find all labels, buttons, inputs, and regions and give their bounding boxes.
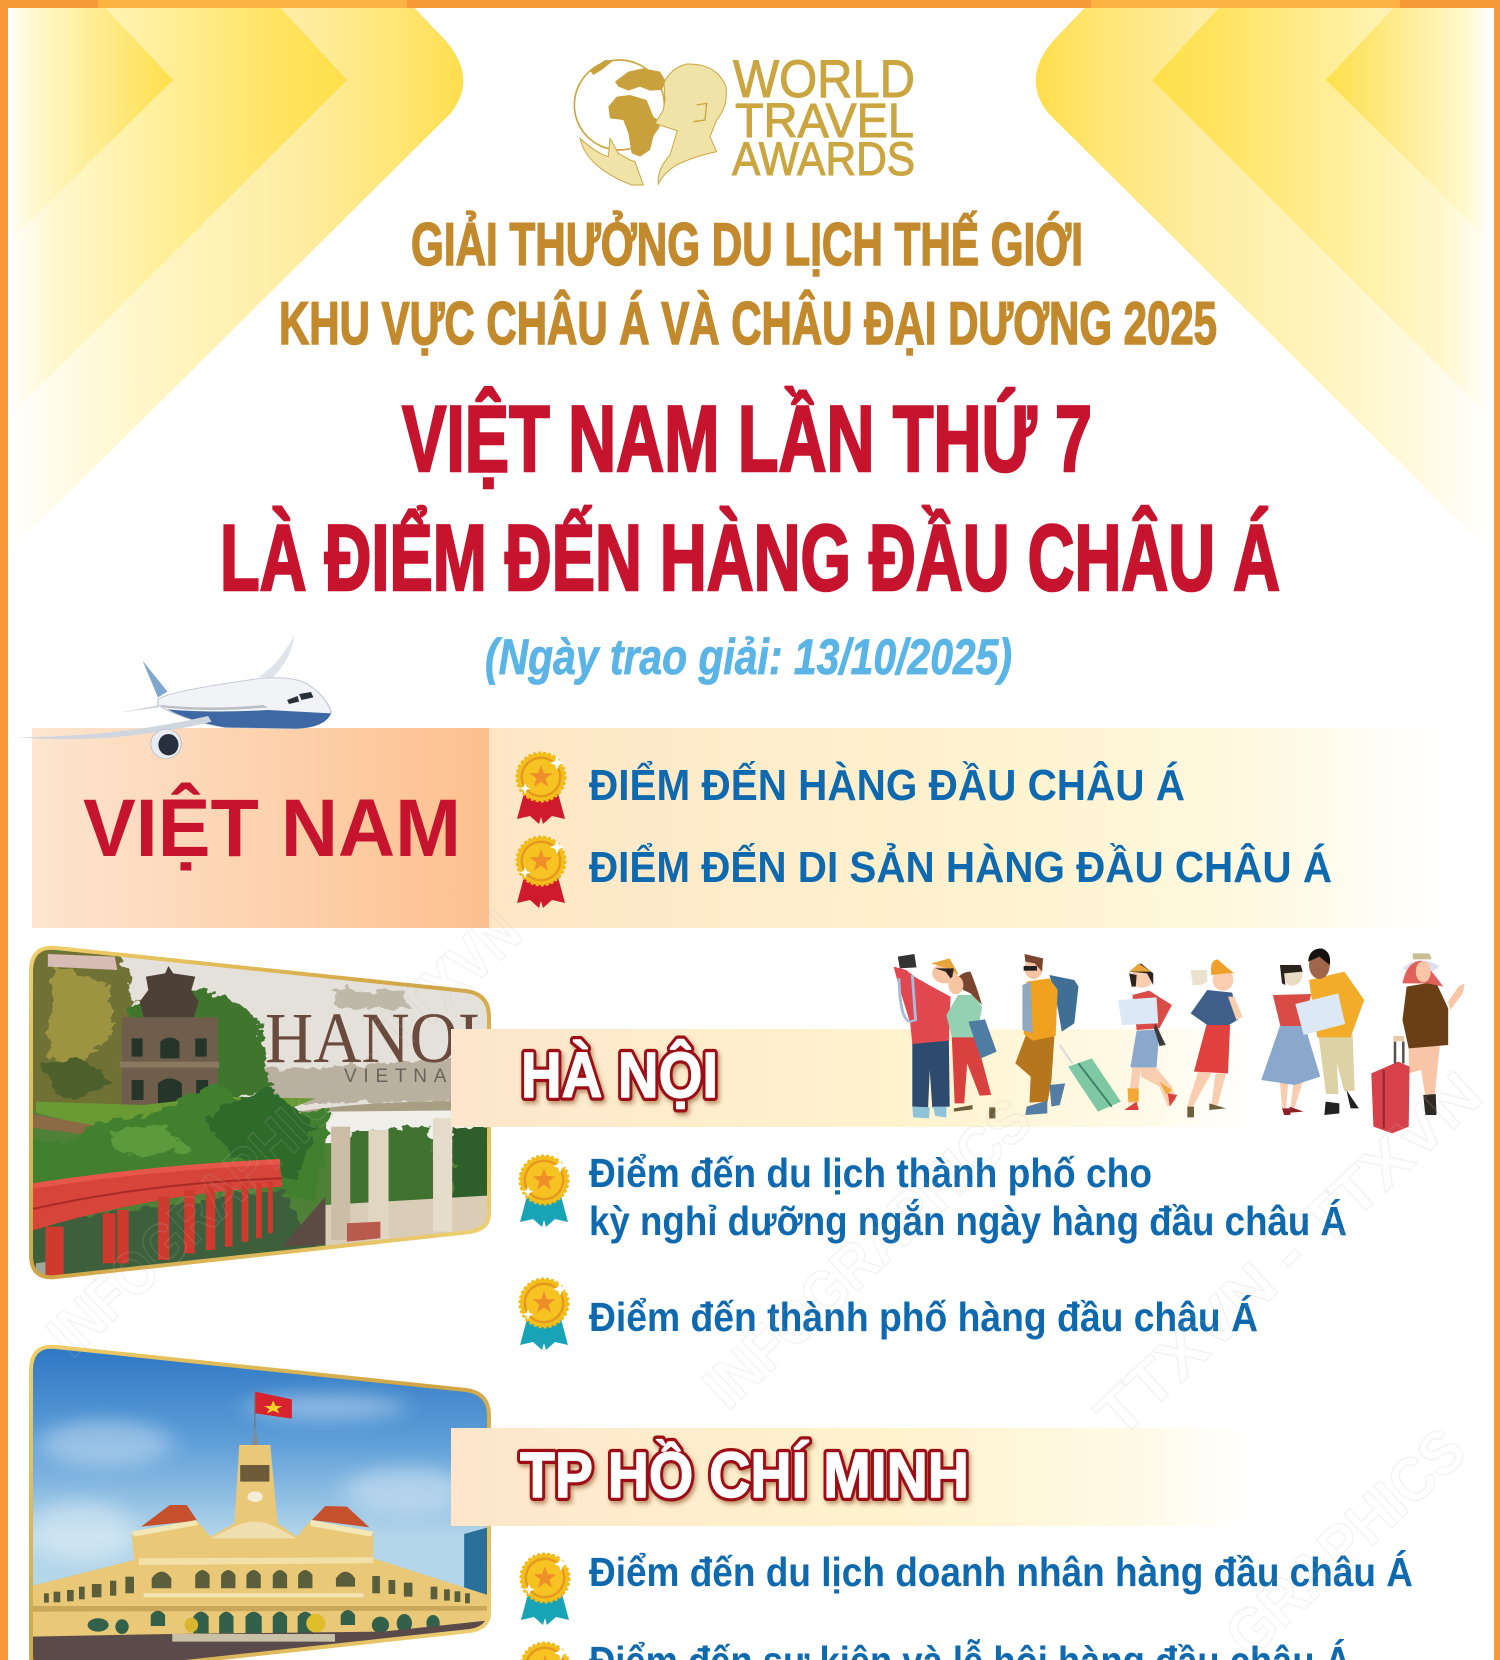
illustration: tourists (894, 948, 1465, 1133)
building body (29, 1445, 493, 1640)
icon: globe, head and hands (574, 60, 726, 185)
award text two lines: kỳ nghỉ dưỡng ngắn ngày hàng đầu châu Á (589, 1198, 1347, 1244)
city name outline: TP HỒ CHÍ MINH (520, 1439, 969, 1511)
photo: Hà Nội (19, 943, 507, 1283)
country name: VIỆT NAM (83, 783, 461, 874)
photo: TP Hồ Chí Minh (29, 1340, 498, 1660)
logo wordmark: AWARDS (732, 132, 915, 185)
heading: award name (279, 211, 1217, 357)
watermark: INFOGRAPHICS - TTXVN (34, 897, 535, 1370)
decorative yellow chevrons right (1036, 0, 1495, 557)
logo wordmark: TRAVEL (735, 95, 914, 148)
gold frame (31, 948, 489, 1277)
woman in green top (946, 972, 997, 1118)
award text two lines: Điểm đến du lịch thành phố cho (589, 1150, 1152, 1196)
panel: Hà Nội heading band (451, 1029, 1251, 1127)
subtitle: award date: (Ngày trao giải: 13/10/2025) (485, 629, 1012, 685)
Huc bridge (29, 1163, 282, 1277)
watermark: INFOGRAPHICS (690, 1085, 1045, 1422)
woman with red suitcase (1371, 953, 1465, 1133)
icon: red medal (517, 753, 565, 824)
man with camera (894, 954, 959, 1118)
awards background (489, 728, 1439, 928)
country label background (32, 728, 489, 928)
flag (255, 1392, 292, 1419)
icon: teal medal (520, 1279, 568, 1350)
photo: Hà Nội: VIETNAM (344, 1066, 469, 1087)
city name fill: HÀ NỘI (521, 1038, 718, 1111)
city name fill: TP HỒ CHÍ MINH (520, 1439, 969, 1511)
woman in striped top (1187, 959, 1243, 1117)
icon: red medal (517, 837, 565, 908)
panel: TP Hồ Chí Minh heading band (451, 1428, 1251, 1526)
photo scene (33, 950, 487, 1276)
decorative yellow chevrons left (4, 0, 463, 557)
icon: teal medal (520, 1156, 568, 1227)
award text: ĐIỂM ĐẾN DI SẢN HÀNG ĐẦU CHÂU Á (589, 841, 1332, 892)
icon: airplane (17, 635, 331, 759)
logo wordmark (732, 50, 915, 185)
icon: teal medal (521, 1643, 569, 1660)
heading: award name: GIẢI THƯỞNG DU LỊCH THẾ GIỚI (411, 211, 1083, 278)
photo lettering: HANOI (265, 998, 480, 1078)
award text: ĐIỂM ĐẾN HÀNG ĐẦU CHÂU Á (589, 759, 1185, 810)
band (451, 1428, 1251, 1526)
gold frame (31, 1347, 489, 1660)
watermark: TTXVN - TTXVN (1082, 1059, 1495, 1450)
award text: Điểm đến thành phố hàng đầu châu Á (589, 1294, 1258, 1340)
title (220, 386, 1280, 610)
panel: Việt Nam (32, 728, 1439, 928)
city name outline: HÀ NỘI (521, 1038, 718, 1111)
logo: World Travel Awards (574, 50, 915, 185)
band (451, 1029, 1251, 1127)
list: Hà Nội awards (520, 1150, 1347, 1350)
photo scene (29, 1340, 498, 1660)
couple with map (1261, 948, 1364, 1115)
pagoda (140, 966, 199, 1017)
award text two lines (589, 1150, 1347, 1244)
logo wordmark: WORLD (733, 50, 915, 109)
watermark (34, 897, 1495, 1660)
icon: teal medal (521, 1554, 569, 1625)
title: VIỆT NAM LẦN THỨ 7 (402, 386, 1092, 491)
award text: Điểm đến du lịch doanh nhân hàng đầu châu Á (589, 1549, 1413, 1595)
right tower (464, 1527, 488, 1597)
woman with map (1118, 963, 1177, 1110)
man with backpack and suitcase (1015, 954, 1121, 1115)
list: TP Hồ Chí Minh awards (521, 1549, 1413, 1660)
